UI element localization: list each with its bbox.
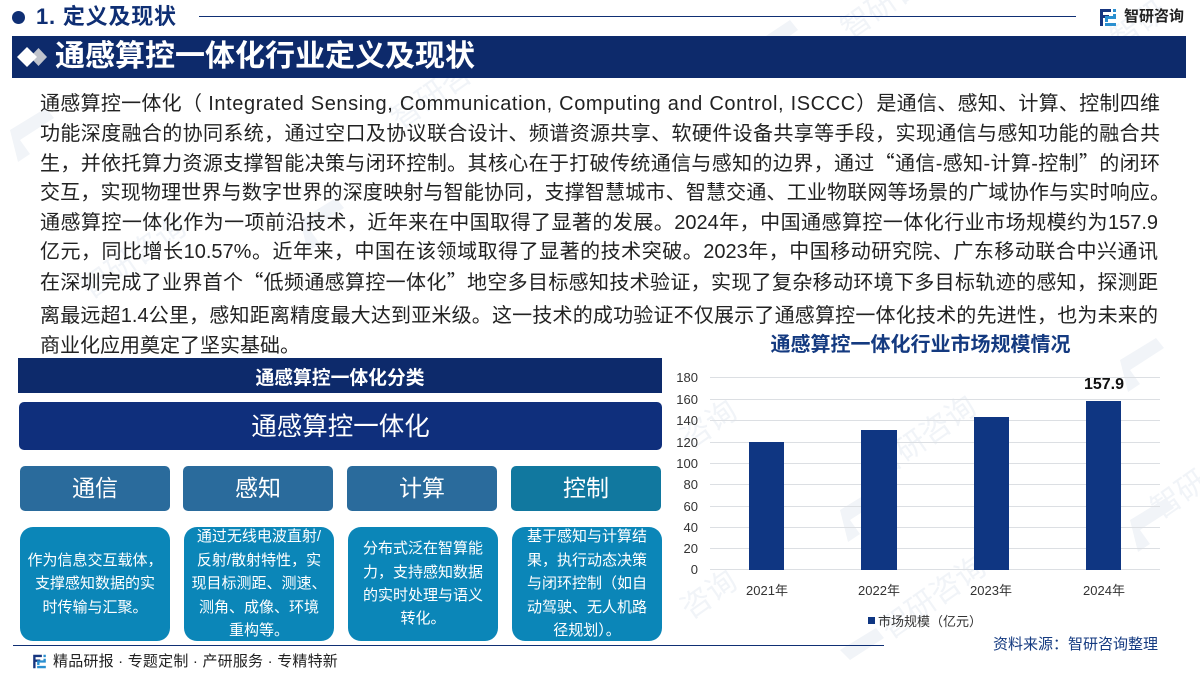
body text: 商业化应用奠定了坚实基础。 [40, 335, 300, 357]
y axis labels: 120 [676, 435, 698, 450]
description: 感知 [184, 527, 334, 641]
category: 通信 [20, 466, 170, 511]
description: 通信: 时传输与汇聚。 [42, 599, 148, 616]
y axis labels [676, 370, 698, 577]
x axis labels: 2024年 [1083, 583, 1125, 598]
body text [40, 93, 1170, 357]
text: 智研咨询 [385, 40, 502, 136]
category: 计算 [347, 466, 497, 511]
panel heading: 通感算控一体化分类 [255, 367, 425, 388]
bar chart [676, 370, 1160, 629]
y axis labels: 80 [684, 477, 698, 492]
y axis labels: 160 [676, 392, 698, 407]
description: 控制: 动驾驶、无人机路 [527, 599, 647, 616]
y axis labels: 40 [684, 520, 698, 535]
brand logo: 智研咨询 [1100, 8, 1184, 26]
footer slogan: 精品研报 · 专题定制 · 产研服务 · 专精特新 [53, 653, 338, 670]
text: 咨询 [675, 564, 743, 626]
body text: 交互，实现物理世界与数字世界的深度映射与智能协同，支撑智慧城市、智慧交通、工业物联网等场景的广域协作与实时响应。 [40, 182, 1170, 204]
description: 感知: 通过无线电波直射/ [197, 528, 321, 545]
body text: 生，并依托算力资源支撑智能决策与闭环控制。其核心在于打破传统通信与感知的边界，通过“通信-感知-计算-控制”的闭环 [40, 147, 1160, 176]
title banner [12, 36, 1186, 78]
description: 计算: 转化。 [400, 610, 446, 627]
root node: 通感算控一体化 [251, 413, 430, 441]
description: 计算: 分布式泛在智算能 [363, 540, 483, 557]
source note: 资料来源：智研咨询整理 [993, 636, 1158, 653]
value label: 157.9 [1084, 376, 1124, 393]
description: 控制: 基于感知与计算结 [527, 528, 647, 545]
body text: 通感算控一体化（ Integrated Sensing, Communication, Computing and Control, ISCCC）是通信、感知、计算、控制四维 [40, 93, 1160, 115]
description: 通信: 作为信息交互载体， [27, 552, 162, 569]
y axis labels: 60 [684, 499, 698, 514]
root node [19, 402, 662, 450]
x axis labels: 2021年 [746, 583, 788, 598]
body text: 亿元，同比增长10.57%。近年来，中国在该领域取得了显著的技术突破。2023年，中国移动研究院、广东移动联合中兴通讯 [40, 241, 1158, 263]
y axis labels: 20 [684, 541, 698, 556]
bars [749, 401, 1121, 570]
description: 感知: 现目标测距、测速、 [191, 575, 326, 592]
x axis labels [746, 583, 1125, 598]
section heading: 1. 定义及现状: 1. 定义及现状 [36, 4, 177, 29]
text: 智研咨询 [75, 210, 192, 306]
legend: 市场规模（亿元） [878, 614, 982, 629]
body text: 在深圳完成了业界首个“低频通感算控一体化”地空多目标感知技术验证，实现了复杂移动环境下多目标轨迹的感知，探测距 [40, 266, 1158, 295]
y axis labels: 140 [676, 413, 698, 428]
description: 感知: 重构等。 [229, 622, 289, 639]
description: 计算: 力，支持感知数据 [363, 564, 483, 581]
category: 计算: 计算 [399, 475, 445, 501]
y axis labels: 0 [691, 562, 698, 577]
panel: classification [18, 358, 662, 641]
category: 通信: 通信 [72, 475, 118, 501]
category: 感知: 感知 [235, 475, 281, 501]
description: 感知: 测角、成像、环境 [199, 599, 319, 616]
description: 计算: 的实时处理与语义 [363, 587, 483, 604]
text: 咨询 [675, 394, 743, 456]
description: 控制: 果，执行动态决策 [527, 552, 647, 569]
x axis labels: 2023年 [970, 583, 1012, 598]
text: 智研咨询 [875, 550, 992, 646]
body text: 离最远超1.4公里，感知距离精度最大达到亚米级。这一技术的成功验证不仅展示了通感算控一体化技术的先进性，也为未来的 [40, 305, 1158, 327]
panel heading [18, 358, 662, 393]
description: 感知: 反射/散射特性，实 [197, 552, 321, 569]
y axis labels: 100 [676, 456, 698, 471]
y axis labels: 180 [676, 370, 698, 385]
description: 通信 [20, 527, 170, 641]
category: 控制: 控制 [563, 475, 609, 501]
category: 感知 [183, 466, 333, 511]
body text: 功能深度融合的协同系统，通过空口及协议联合设计、频谱资源共享、软硬件设备共享等手段，实现通信与感知功能的融合共 [40, 123, 1160, 145]
description: 计算 [348, 527, 498, 641]
title text: 通感算控一体化行业定义及现状 [55, 40, 475, 73]
description: 控制: 径规划）。 [553, 622, 621, 639]
chart title: 通感算控一体化行业市场规模情况 [770, 334, 1070, 356]
brand logo: 智研咨询: 智研咨询 [1124, 8, 1184, 25]
description: 控制 [512, 527, 662, 641]
x axis labels: 2022年 [858, 583, 900, 598]
body text: 通感算控一体化作为一项前沿技术，近年来在中国取得了显著的发展。2024年，中国通感算控一体化行业市场规模约为157.9 [40, 212, 1158, 234]
category: 控制 [511, 466, 661, 511]
icon: diamonds [17, 47, 47, 67]
description: 通信: 支撑感知数据的实 [35, 575, 155, 592]
description: 控制: 与闭环控制（如自 [527, 575, 647, 592]
text: 智研咨询 [865, 390, 982, 486]
